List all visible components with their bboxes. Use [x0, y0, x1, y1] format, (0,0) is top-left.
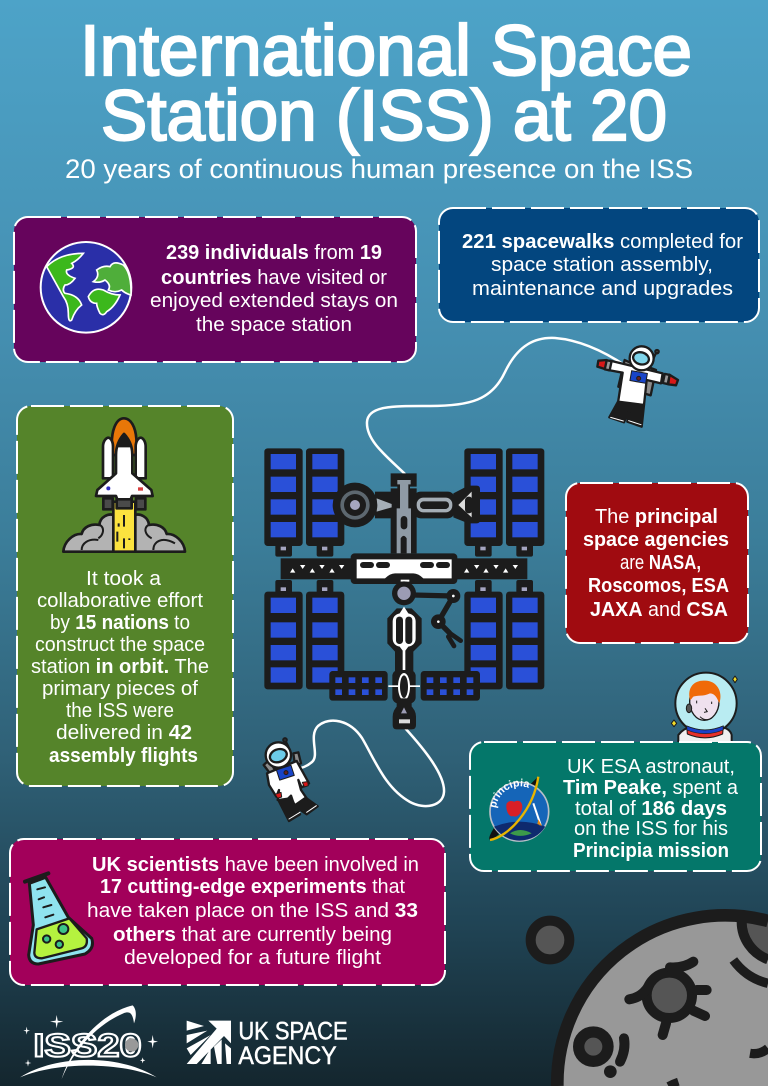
panel: assembly: [17, 406, 233, 786]
text: assembly: station in orbit. The: [31, 656, 209, 678]
title: Station (ISS) at 20: [101, 77, 667, 156]
title: International Space: [80, 12, 692, 91]
panel: spacewalks: 221 spacewalks completed for: [462, 231, 743, 253]
text: Tim Peake: on the ISS for his: [574, 818, 728, 840]
panel: space agencies: The principal: [595, 506, 718, 528]
tether: lower: [292, 721, 444, 806]
panel: space agencies: JAXA and CSA: [590, 599, 728, 621]
text: visitors: 239 individuals from 19: [166, 242, 382, 264]
tether: upper: [367, 338, 626, 474]
upper modules: [333, 473, 480, 553]
text: UK experiments: 17 cutting-edge experiments that: [100, 876, 405, 898]
panel: UK experiments: [10, 839, 445, 985]
logo: UK Space Agency: UK SPACE: [238, 1017, 348, 1045]
text: visitors: [150, 242, 398, 336]
text: Tim Peake: Tim Peake, spent a: [563, 777, 739, 799]
astronaut: lower left: [264, 738, 318, 821]
icon: space shuttle launch: [63, 418, 185, 552]
text: UK experiments: developed for a future flight: [124, 947, 381, 969]
panel: spacewalks: space station assembly,: [491, 254, 713, 276]
truss: [281, 558, 527, 579]
text: visitors: countries have visited or: [161, 267, 387, 289]
panel: spacewalks: [439, 208, 759, 322]
panel: spacewalks: maintenance and upgrades: [472, 278, 733, 300]
text: UK experiments: [87, 854, 419, 969]
text: assembly: primary pieces of: [42, 678, 198, 700]
logo: ISS20: [20, 1005, 158, 1079]
panel: space agencies: Roscomos, ESA: [588, 575, 729, 597]
text: UK experiments: others that are currently being: [113, 924, 392, 946]
text: assembly: the ISS were: [66, 700, 174, 722]
text: UK experiments: UK scientists have been involved in: [92, 854, 419, 876]
panel: space agencies: [566, 483, 748, 643]
text: assembly: by 15 nations to: [50, 612, 190, 634]
text: UK experiments: have taken place on the ISS and 33: [87, 900, 418, 922]
lower modules: [329, 581, 480, 729]
text: Tim Peake: Principia mission: [573, 840, 729, 862]
text: assembly: construct the space: [35, 634, 205, 656]
logo: ISS20: ISS20: [33, 1028, 142, 1064]
icon: flask: [25, 873, 92, 964]
icon: Principia mission badge: principia: [490, 778, 529, 808]
logo: UK Space Agency: AGENCY: [238, 1042, 337, 1070]
title: [80, 12, 692, 156]
text: Tim Peake: [563, 756, 739, 862]
panel: space agencies: are NASA,: [620, 552, 701, 574]
panel: space agencies: space agencies: [583, 529, 729, 551]
text: Tim Peake: total of 186 days: [575, 798, 727, 820]
text: Tim Peake: UK ESA astronaut,: [567, 756, 735, 778]
text: assembly: delivered in 42: [56, 722, 192, 744]
subtitle: 20 years of continuous human presence on the ISS: [65, 154, 693, 184]
solar arrays: [264, 448, 544, 689]
icon: globe: [41, 242, 131, 333]
text: assembly: collaborative effort: [37, 590, 203, 612]
astronaut: upper right: [597, 346, 678, 427]
text: assembly: [31, 568, 209, 767]
text: visitors: the space station: [196, 314, 352, 336]
text: visitors: enjoyed extended stays on: [150, 290, 398, 312]
robotic arm: [413, 589, 461, 646]
text: assembly: assembly flights: [49, 745, 198, 767]
ISS station: [264, 448, 544, 729]
logo: UK Space Agency: [187, 1017, 348, 1070]
panel: Tim Peake: [469, 741, 762, 872]
text: assembly: It took a: [86, 568, 162, 590]
icon: Principia mission badge: [489, 776, 550, 842]
panel: visitors: [14, 217, 416, 362]
illustration: Tim Peake: [671, 673, 737, 743]
small blue panels: [335, 677, 473, 695]
central module: [351, 553, 457, 584]
moon: [531, 915, 768, 1086]
